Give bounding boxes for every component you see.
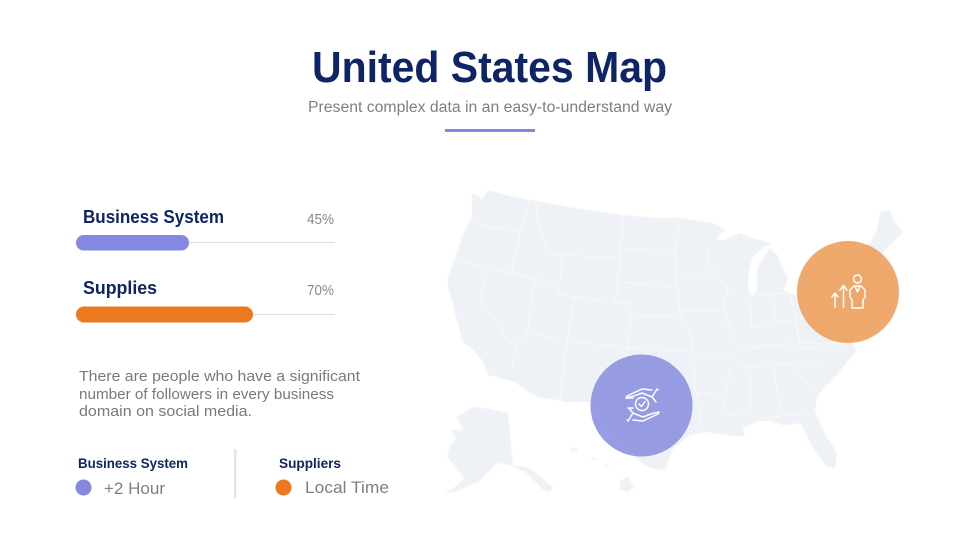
title: United States Map	[312, 43, 667, 92]
panel: progress bars	[76, 207, 335, 322]
bar label: Business System: Business System	[83, 207, 224, 227]
value: 70%: 70%	[307, 283, 334, 299]
description text: number of followers in every business	[79, 386, 334, 403]
map: United States	[443, 190, 903, 495]
marker: purple circle with hands icon	[590, 354, 692, 456]
Hawaiian islands small	[570, 447, 609, 469]
contiguous states shape	[448, 190, 903, 470]
marker: orange circle with person icon	[797, 241, 899, 343]
legend divider	[234, 449, 236, 498]
value: 45%: 45%	[307, 212, 334, 228]
description text	[79, 368, 361, 420]
legend: Suppliers	[276, 455, 389, 497]
legend: Suppliers: Local Time	[305, 478, 389, 497]
legend: Business System: +2 Hour	[104, 479, 165, 498]
subtitle: Present complex data in an easy-to-understand way	[308, 99, 672, 116]
bar fill: Business System 45%	[76, 235, 189, 250]
description text: domain on social media.	[79, 403, 252, 420]
legend: Business System	[76, 455, 188, 498]
Hawaii	[620, 477, 634, 492]
icon: person with rising arrows	[832, 275, 865, 308]
Alaska	[443, 407, 553, 495]
description text: There are people who have a significant	[79, 368, 361, 385]
icon: hands protecting check mark	[626, 389, 659, 421]
legend: Business System: Business System	[78, 455, 188, 471]
bar label: Supplies: Supplies	[83, 278, 157, 298]
bar fill: Supplies 70%	[76, 306, 253, 322]
legend: Suppliers: Suppliers	[279, 455, 341, 471]
title underline	[445, 129, 535, 132]
bar track: Supplies	[76, 314, 335, 315]
bar track: Business System	[76, 242, 335, 243]
state borders	[455, 200, 850, 430]
